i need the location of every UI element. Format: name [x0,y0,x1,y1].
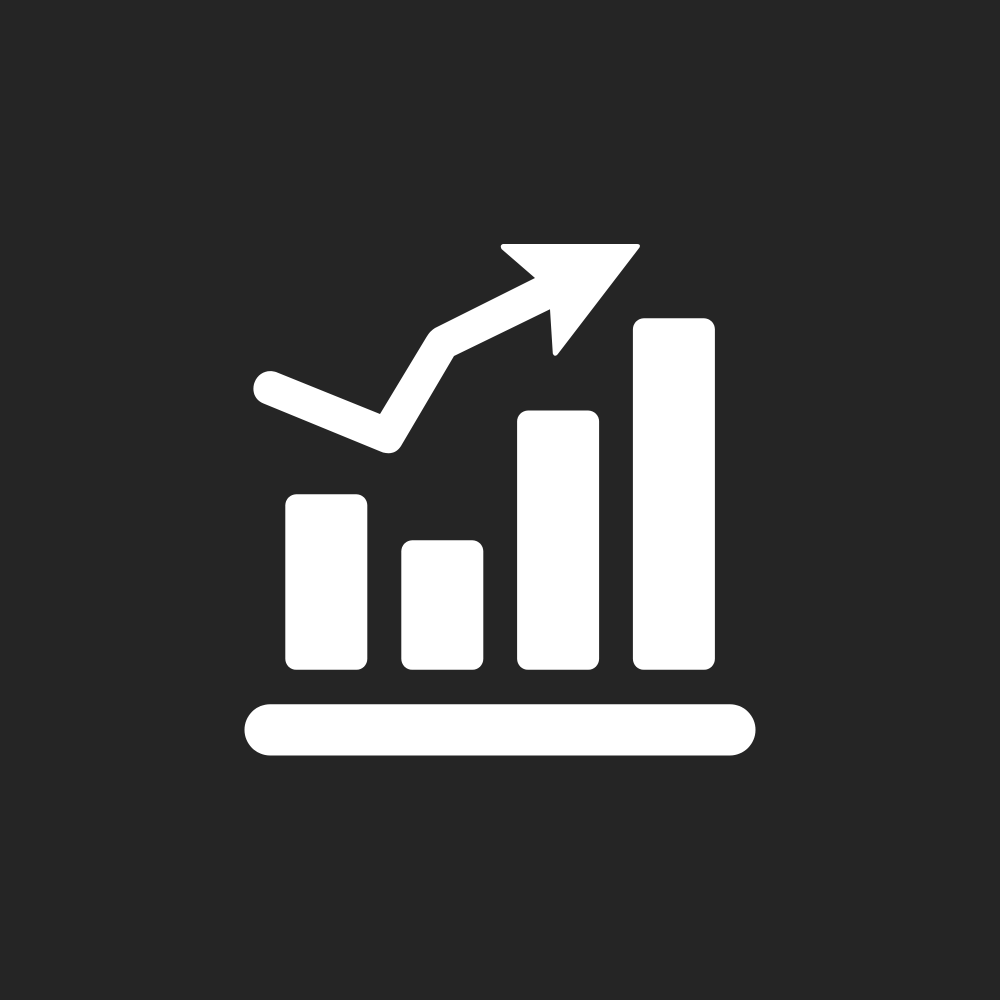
bar 3 [517,410,599,670]
bar 1 [285,494,367,670]
baseline [244,704,756,756]
bar 2 [401,540,483,670]
icon: rising trend arrow [253,244,640,453]
bar 4 [633,318,715,670]
